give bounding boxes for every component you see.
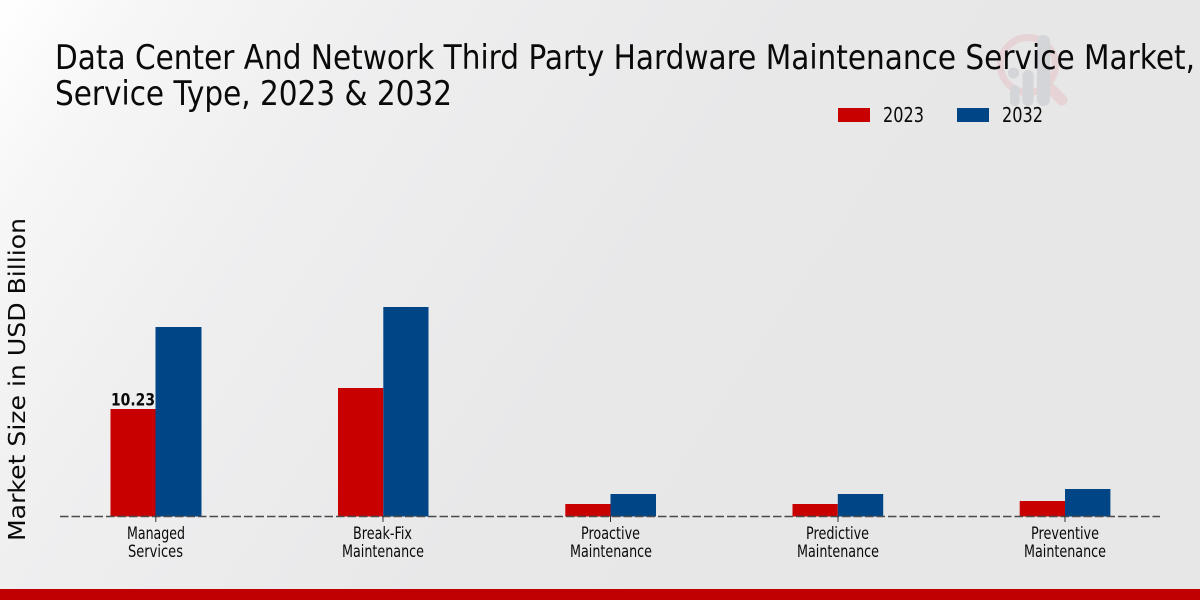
bars: Proactive Maintenance [565,494,656,516]
category labels: Predictive [806,524,869,543]
category labels: Maintenance [797,542,879,561]
value label: 10.23 [111,390,155,410]
category labels: Maintenance [570,542,652,561]
title [55,38,1195,113]
category labels: Break-Fix [353,524,412,543]
category labels: Proactive [581,524,640,543]
title: Service Type, 2023 & 2032 [55,74,452,113]
bars: Preventive Maintenance [1020,489,1110,516]
category labels: Managed [127,524,185,543]
x axis baseline [60,516,1160,518]
bars: Break-Fix Maintenance [338,307,428,516]
bar chart [60,307,1160,561]
category labels: Preventive [1031,524,1099,543]
legend [838,103,1043,127]
category labels: Maintenance [1024,542,1106,561]
legend: 2023 [883,103,924,127]
y axis label: Market Size in USD Billion [3,218,31,541]
footer bar [0,589,1200,600]
category labels: Services [128,542,183,561]
bars: Predictive Maintenance [792,494,883,516]
bars: Managed Services [110,327,202,516]
watermark logo [1000,35,1062,106]
legend: 2032 [1002,103,1043,127]
category labels: Maintenance [342,542,424,561]
category labels [127,524,1106,561]
